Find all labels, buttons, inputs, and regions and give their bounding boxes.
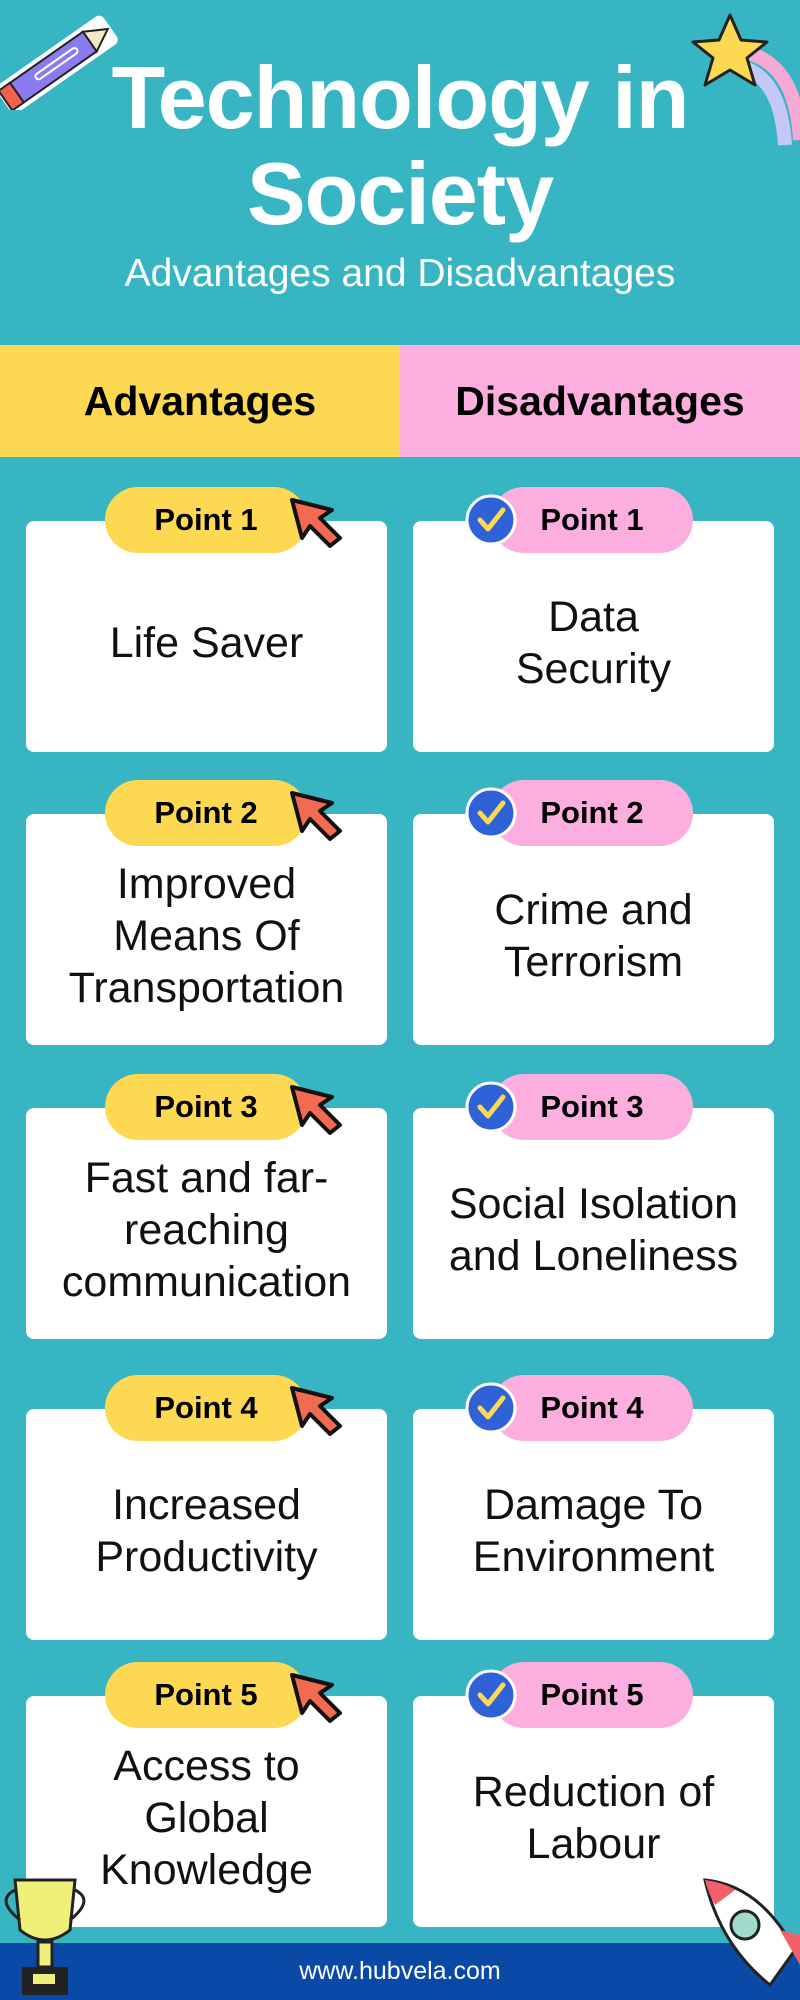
card: advantage 2 [26,814,387,1045]
card: disadvantage 5: Reduction of [473,1768,714,1816]
card: disadvantage 2: Terrorism [504,938,683,986]
card: advantage 4: Increased [112,1480,301,1528]
header: disadvantages [400,345,800,457]
title: Society [247,144,553,243]
card: advantage 4 [26,1409,387,1640]
pill: advantage point 5: Point 5 [154,1677,258,1712]
header: advantages: Advantages [84,378,316,424]
pill: advantage point 1 [105,487,307,553]
header: disadvantages: Disadvantages [455,378,745,424]
footer: www.hubvela.com [299,1957,501,1985]
card: disadvantage 4: Damage To [484,1480,703,1528]
pill: advantage point 4 [105,1375,307,1441]
pill: disadvantage point 2: Point 2 [540,795,644,830]
card: disadvantage 1: Data [548,592,639,640]
card: disadvantage 1: Security [516,644,671,692]
card: advantage 5 [26,1696,387,1927]
icon: rocket [703,1878,800,1987]
card: advantage 1: Life Saver [110,618,303,666]
card: disadvantage 3 [413,1108,774,1339]
pill: disadvantage point 1 [491,487,693,553]
pill: advantage point 3: Point 3 [154,1089,258,1124]
card: advantage 5: Knowledge [100,1846,313,1894]
card: disadvantage 4 [413,1409,774,1640]
card: advantage 2: Means Of [113,912,300,960]
header: advantages [0,345,400,457]
pill: advantage point 2: Point 2 [154,795,258,830]
card: advantage 3: communication [62,1258,351,1306]
card: advantage 5: Global [144,1794,269,1842]
pill: disadvantage point 3: Point 3 [540,1089,644,1124]
card: advantage 3: Fast and far- [85,1154,328,1202]
card: disadvantage 5: Labour [527,1820,660,1868]
card: advantage 2: Improved [117,860,296,908]
card: advantage 2: Transportation [69,964,344,1012]
footer [0,1943,800,2000]
icon: trophy [4,1878,86,1995]
subtitle: Advantages and Disadvantages [125,252,675,295]
card: advantage 1 [26,521,387,752]
pill: advantage point 3 [105,1074,307,1140]
pill: disadvantage point 1: Point 1 [540,502,644,537]
card: disadvantage 2: Crime and [494,886,693,934]
pill: advantage point 1: Point 1 [154,502,258,537]
card: advantage 4: Productivity [95,1532,318,1580]
pill: disadvantage point 5: Point 5 [540,1677,644,1712]
title: Technology in [112,48,688,147]
pill: advantage point 4: Point 4 [154,1390,258,1425]
pill: advantage point 5 [105,1662,307,1728]
card: disadvantage 3: and Loneliness [449,1232,738,1280]
card: disadvantage 1 [413,521,774,752]
pill: disadvantage point 2 [491,780,693,846]
card: disadvantage 5 [413,1696,774,1927]
icon: star with rainbow [691,14,800,146]
card: disadvantage 3: Social Isolation [449,1180,738,1228]
pill: disadvantage point 5 [491,1662,693,1728]
pill: disadvantage point 4 [491,1375,693,1441]
pill: advantage point 2 [105,780,307,846]
icon: pencil [0,16,118,110]
card: disadvantage 4: Environment [473,1532,714,1580]
pill: disadvantage point 4: Point 4 [540,1390,644,1425]
card: advantage 5: Access to [113,1742,300,1790]
title [112,48,688,243]
card: advantage 3: reaching [124,1206,289,1254]
card: disadvantage 2 [413,814,774,1045]
pill: disadvantage point 3 [491,1074,693,1140]
card: advantage 3 [26,1108,387,1339]
